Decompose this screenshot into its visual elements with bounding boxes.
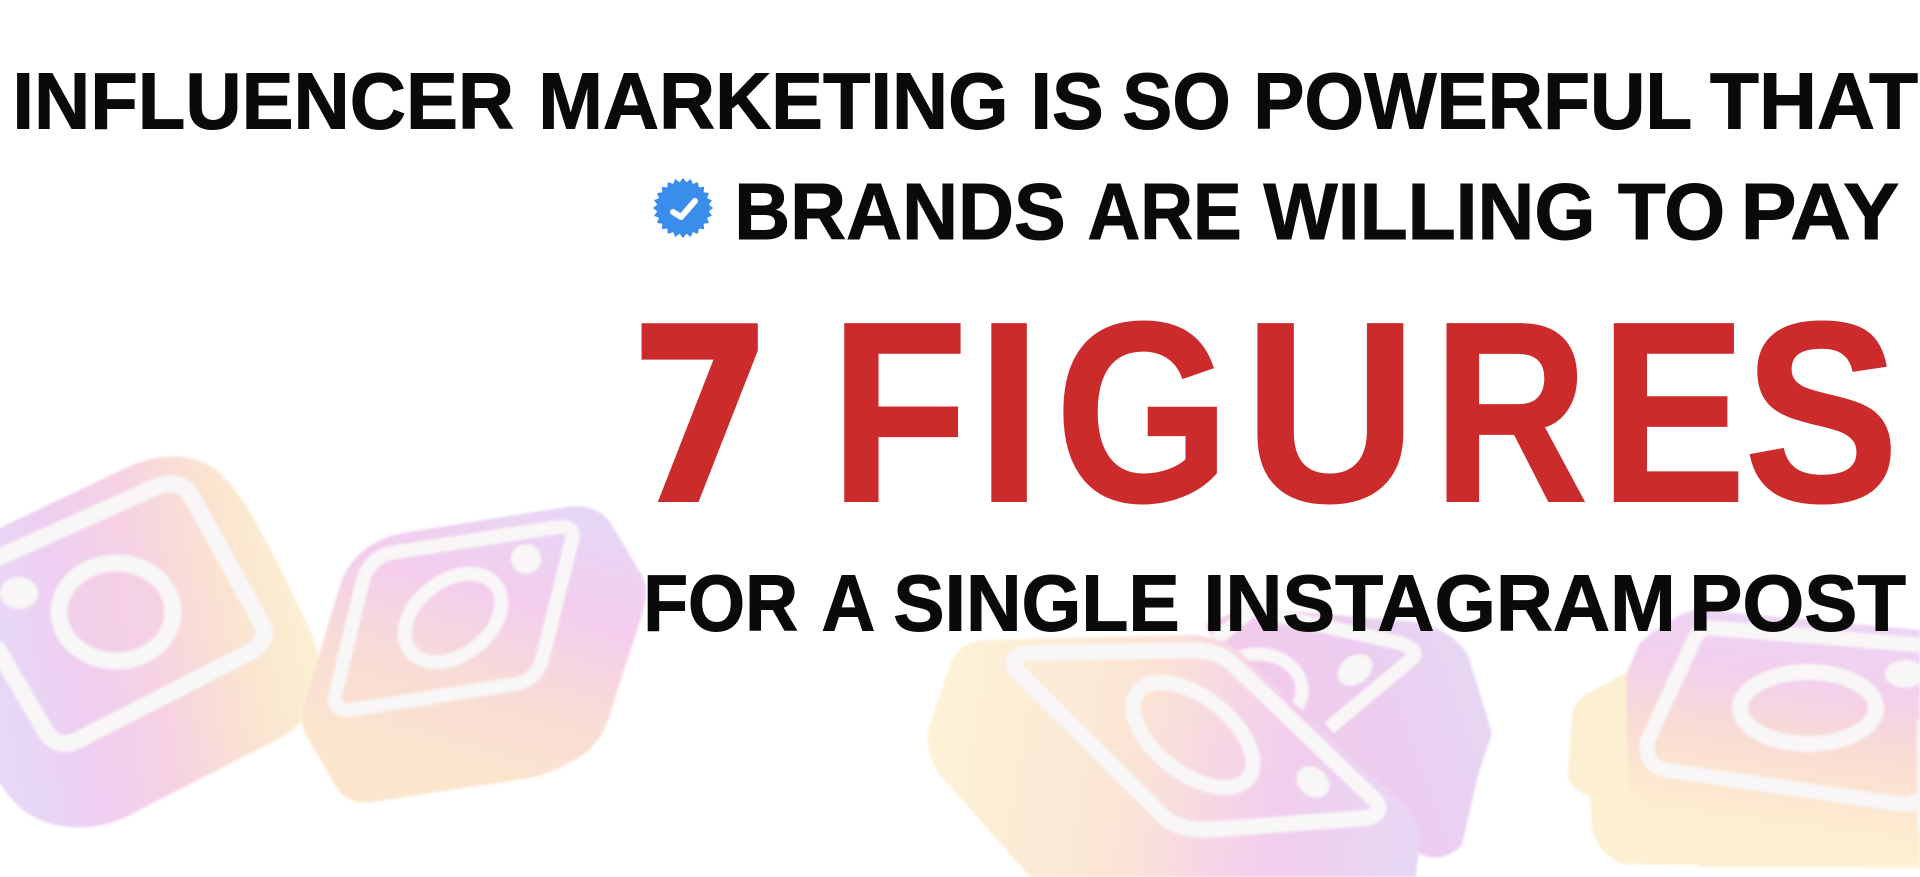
heading: first line: IS <box>1030 56 1104 146</box>
heading: closing line: A <box>822 558 874 648</box>
heading: second line: TO <box>1618 167 1725 256</box>
headline: 7 figures: 7 <box>629 276 773 558</box>
heading: closing line: FOR <box>643 558 798 648</box>
icon: glossy Instagram logo, centre-left <box>302 506 646 803</box>
headline: 7 figures <box>629 269 1899 558</box>
heading: closing line: SINGLE <box>893 558 1180 648</box>
headline: 7 figures: E <box>1600 269 1746 556</box>
heading: first line: THAT <box>1710 56 1918 146</box>
headline: 7 figures: R <box>1433 269 1588 556</box>
headline: 7 figures: U <box>1244 269 1417 556</box>
heading: first line: SO <box>1122 56 1231 146</box>
icon: front Instagram logo, bottom centre <box>928 635 1420 877</box>
heading: second line: WILLING <box>1264 167 1596 256</box>
icon: blue verified badge <box>653 178 713 238</box>
icon: back Instagram logo, bottom centre <box>1205 607 1492 858</box>
icon: large glossy Instagram logo, left <box>0 456 321 827</box>
heading: second line: PAY <box>1741 167 1899 256</box>
heading: first line: MARKETING <box>538 56 1008 146</box>
headline: 7 figures: S <box>1744 269 1899 556</box>
heading: second line: BRANDS <box>734 167 1066 256</box>
icon: stacked Instagram logo, bottom right <box>1568 610 1920 868</box>
heading: first line: POWERFUL <box>1253 56 1691 146</box>
headline: 7 figures: I <box>977 269 1042 556</box>
headline: 7 figures: F <box>830 269 968 556</box>
heading: first line: INFLUENCER <box>12 56 514 146</box>
heading: second line: ARE <box>1088 167 1242 256</box>
heading: closing line: POST <box>1689 558 1906 648</box>
headline: 7 figures: G <box>1055 269 1230 556</box>
heading: closing line: INSTAGRAM <box>1203 558 1676 648</box>
